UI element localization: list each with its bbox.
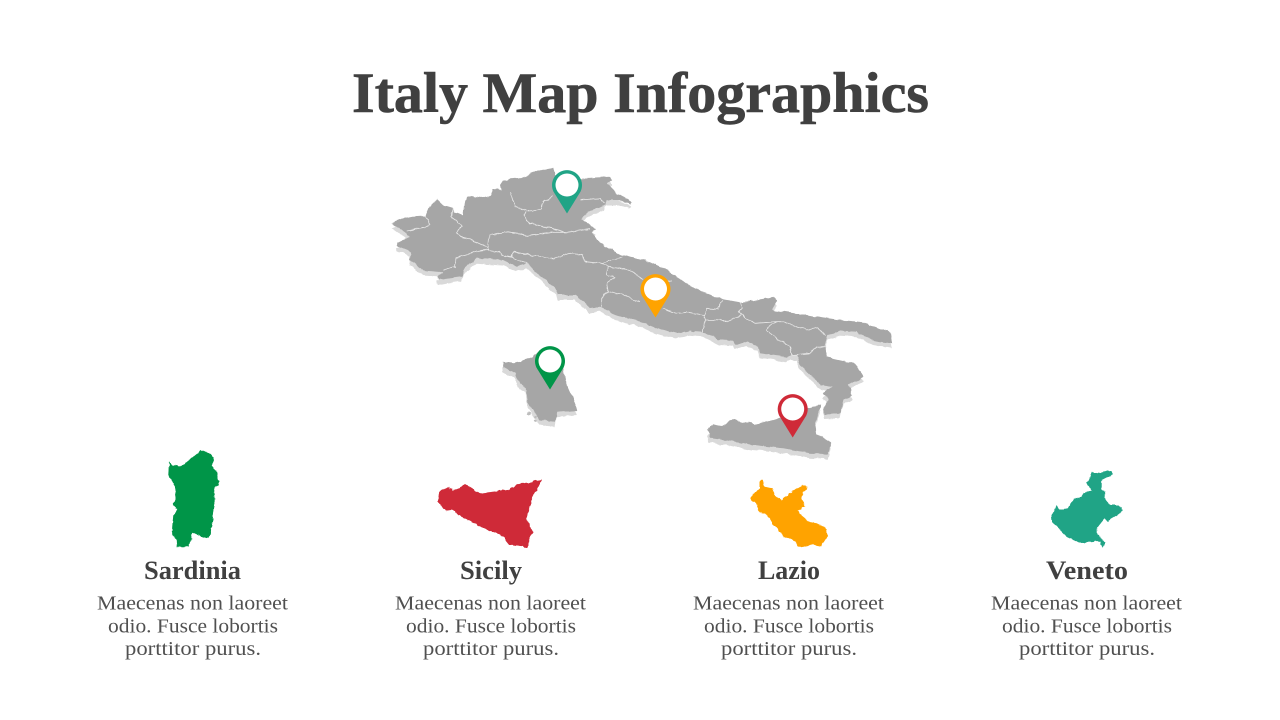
title: Italy Map Infographics (352, 62, 929, 125)
description: Veneto: porttitor purus. (1019, 638, 1155, 660)
mainland Italy (392, 168, 892, 414)
pin: Sardinia (535, 346, 565, 390)
heading: Sicily: Sicily (460, 556, 522, 585)
Sardinian islets (528, 413, 536, 422)
description: Lazio: porttitor purus. (721, 638, 857, 660)
description: Sardinia: odio. Fusce lobortis (108, 616, 278, 638)
description: Veneto (991, 592, 1182, 660)
pin: Sicily (778, 394, 808, 438)
description: Lazio: odio. Fusce lobortis (704, 616, 874, 638)
description: Lazio (693, 592, 884, 660)
description: Sicily: odio. Fusce lobortis (406, 616, 576, 638)
description: Sardinia (97, 592, 288, 660)
map shadow (391, 173, 892, 459)
icon: Sicily shape (438, 479, 542, 548)
icon: Veneto shape (1051, 471, 1123, 548)
map of Italy (391, 168, 892, 459)
description: Sardinia: porttitor purus. (125, 638, 261, 660)
Sardinia on map (503, 350, 577, 422)
text block: Sicily (395, 556, 586, 660)
region borders (407, 192, 827, 355)
icon: Lazio shape (750, 479, 827, 547)
description: Lazio: Maecenas non laoreet (693, 592, 884, 614)
heading: Lazio: Lazio (758, 556, 820, 585)
pin: Lazio (640, 274, 670, 318)
icon: Sardinia shape (168, 450, 219, 547)
description: Sicily (395, 592, 586, 660)
description: Sicily: porttitor purus. (423, 638, 559, 660)
heading: Sardinia: Sardinia (144, 556, 241, 585)
region shapes (168, 450, 1123, 548)
Sicily on map (707, 405, 832, 454)
heading: Veneto: Veneto (1046, 556, 1128, 585)
description: Veneto: odio. Fusce lobortis (1002, 616, 1172, 638)
pin: Veneto (552, 170, 582, 214)
text block: Sardinia (97, 556, 288, 660)
text block: Veneto (991, 556, 1182, 660)
text block: Lazio (693, 556, 884, 660)
description: Sardinia: Maecenas non laoreet (97, 592, 288, 614)
description: Sicily: Maecenas non laoreet (395, 592, 586, 614)
description: Veneto: Maecenas non laoreet (991, 592, 1182, 614)
